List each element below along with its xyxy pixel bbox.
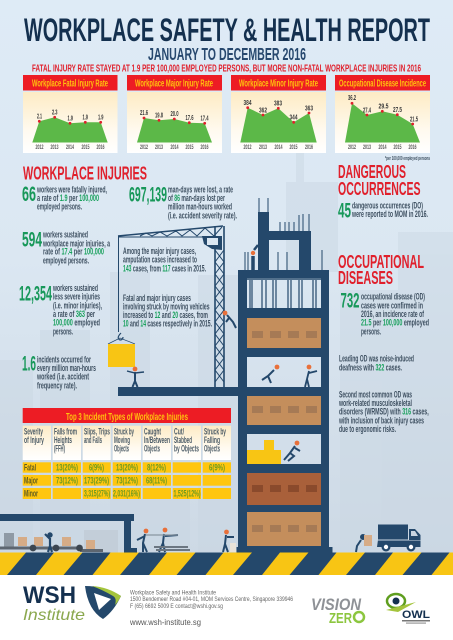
text: amputation cases: amputation cases increased to bbox=[123, 255, 197, 265]
table: top 3 incident types: Falling bbox=[204, 434, 220, 445]
table: top 3 incident types: (FFH) bbox=[54, 442, 65, 454]
chart: workplace major injury rate: 2014 bbox=[170, 145, 179, 151]
chart: workplace minor injury rate: 384 bbox=[244, 98, 252, 107]
chart: workplace fatal injury rate: Workplace Fatal Injury Rate bbox=[32, 78, 108, 90]
heading: occupational diseases bbox=[338, 251, 424, 288]
table: top 3 incident types: In/Between bbox=[144, 434, 170, 445]
logo: Vision Zero: ZER bbox=[329, 610, 352, 627]
stat: 697,139 man-days lost: 697,139 bbox=[129, 184, 167, 206]
stat: 66 fatalities bbox=[22, 183, 107, 212]
table: top 3 incident types: 173(29%) bbox=[84, 476, 109, 486]
chart: occupational disease incidence: 21.5 bbox=[410, 114, 418, 124]
table: top 3 incident types: and Falls bbox=[84, 434, 102, 445]
stat: 12,354 minor injuries: persons. bbox=[53, 326, 73, 336]
chart: occupational disease incidence: 27.5 bbox=[393, 105, 402, 114]
contact details: F (65) 6692 5009 E contact@wshi.gov.sg bbox=[130, 604, 223, 610]
chart: workplace fatal injury rate bbox=[23, 75, 118, 153]
chart: workplace major injury rate: 21.6 bbox=[140, 108, 148, 117]
chart: workplace major injury rate bbox=[127, 75, 222, 153]
table: top 3 incident types: 6(9%) bbox=[89, 462, 104, 472]
icon: delivery worker bbox=[356, 534, 372, 552]
chart: occupational disease incidence: 2015 bbox=[394, 145, 402, 151]
loading dock bbox=[0, 514, 137, 553]
table: top 3 incident types: 13(20%) bbox=[116, 462, 138, 472]
chart: occupational disease incidence: 36.2 bbox=[348, 93, 356, 102]
icon: delivery truck bbox=[377, 524, 420, 552]
stat: 594 major injuries: employed persons. bbox=[43, 256, 89, 266]
stat: 66 fatalities: 66 bbox=[22, 183, 36, 206]
icon: hanging crate bbox=[108, 344, 135, 367]
table: top 3 incident types: 8(12%) bbox=[147, 462, 166, 472]
contact details bbox=[129, 590, 294, 627]
table: top 3 incident types: 2,031(16%) bbox=[113, 488, 140, 498]
stat: 12,354 minor injuries bbox=[19, 282, 102, 336]
icon: conveyor worker bbox=[45, 533, 52, 552]
stat: 732 occupational disease cases bbox=[340, 290, 429, 336]
chart: occupational disease incidence: 2013 bbox=[363, 145, 371, 151]
stat: 697,139 man-days lost: of 86 man-days lost per bbox=[168, 193, 225, 203]
stat: 1.6 accident frequency rate: frequency rate). bbox=[37, 380, 77, 390]
stat: 697,139 man-days lost: million man-hours worked bbox=[168, 202, 232, 212]
chart: workplace fatal injury rate: 2013 bbox=[50, 145, 59, 151]
table: top 3 incident types: Cut/ bbox=[174, 426, 184, 436]
chart: workplace major injury rate: 19.8 bbox=[155, 110, 163, 120]
chart: workplace major injury rate: 17.6 bbox=[186, 113, 194, 122]
chart: workplace fatal injury rate: 1.9 bbox=[68, 114, 73, 122]
logo: Vision Zero bbox=[311, 595, 364, 627]
stat: 66 fatalities: a rate of 1.9 per 100,000 bbox=[37, 193, 99, 203]
icon: falling worker from crane bbox=[223, 311, 236, 328]
table: top 3 incident types: Struck by bbox=[114, 426, 134, 436]
stat: 594 major injuries bbox=[22, 228, 110, 266]
icon: worker on roof bbox=[251, 245, 258, 270]
stat: 1.6 accident frequency rate bbox=[22, 352, 96, 390]
chart: workplace minor injury rate: Workplace Minor Injury Rate bbox=[239, 78, 318, 90]
chart: workplace major injury rate: 2016 bbox=[200, 145, 209, 151]
logo: WSH Institute: Institute bbox=[23, 607, 85, 624]
table: top 3 incident types: of Injury bbox=[24, 434, 44, 445]
stat: 732 occupational disease cases: 732 bbox=[340, 290, 360, 312]
text: struck by moving vehicles: involving struck by moving vehicles bbox=[123, 302, 210, 312]
table: top 3 incident types: 13(20%) bbox=[56, 462, 78, 472]
chart: workplace minor injury rate: 363 bbox=[305, 104, 313, 112]
chart: workplace minor injury rate: 344 bbox=[290, 112, 298, 122]
chart: occupational disease incidence: 2016 bbox=[408, 145, 417, 151]
stat: 12,354 minor injuries: a rate of 363 per bbox=[53, 309, 95, 319]
chart: workplace fatal injury rate: 1.9 bbox=[98, 112, 104, 122]
stat: 12,354 minor injuries: workers sustained bbox=[52, 283, 98, 293]
chart: workplace fatal injury rate: 2012 bbox=[36, 145, 44, 151]
chart: workplace major injury rate: Workplace Major Injury Rate bbox=[135, 78, 213, 90]
chart: workplace major injury rate: 2015 bbox=[186, 145, 194, 151]
table: top 3 incident types: Objects bbox=[144, 442, 160, 454]
table: top 3 incident types: Stabbed bbox=[174, 434, 192, 445]
logo: WSH Institute: WSH bbox=[23, 582, 76, 609]
chart: workplace minor injury rate: 2015 bbox=[290, 145, 298, 151]
table: top 3 incident types: 73(12%) bbox=[116, 476, 138, 486]
table: top 3 incident types: 73(12%) bbox=[56, 476, 78, 486]
chart: workplace minor injury rate: 2016 bbox=[305, 145, 313, 151]
chart: workplace fatal injury rate: 2.3 bbox=[52, 108, 58, 116]
stat: 594 major injuries: workers sustained bbox=[42, 230, 88, 240]
text: leading occupational disease bbox=[339, 354, 414, 372]
table: top 3 incident types: Caught bbox=[144, 426, 161, 436]
stat: 66 fatalities: employed persons. bbox=[37, 202, 82, 212]
chart: workplace major injury rate: 20.0 bbox=[170, 109, 178, 118]
logo: WSH Institute bbox=[23, 582, 121, 624]
logo: OWL bbox=[386, 594, 430, 624]
table: top 3 incident types: Heights bbox=[54, 434, 72, 445]
chart: workplace major injury rate: 2012 bbox=[140, 145, 148, 151]
stat: 697,139 man-days lost: (i.e. accident severity rate). bbox=[168, 210, 237, 220]
building bbox=[236, 198, 332, 553]
text: struck by moving vehicles: Fatal and major injury cases bbox=[123, 293, 191, 303]
chart: workplace minor injury rate: 362 bbox=[259, 106, 267, 114]
stat: 732 occupational disease cases: 21.5 per 100,000 employed bbox=[361, 318, 429, 328]
text: struck by moving vehicles: increased to 12 and 20 cases, from bbox=[123, 310, 208, 320]
chart: workplace minor injury rate: 383 bbox=[274, 98, 282, 108]
text: amputation cases bbox=[123, 246, 206, 273]
icon: workers carrying beam bbox=[137, 528, 190, 552]
stat: 12,354 minor injuries: less severe injuries bbox=[53, 292, 100, 302]
footer bbox=[0, 575, 453, 640]
contact details: Workplace Safety and Health Institute bbox=[130, 590, 217, 596]
text: struck by moving vehicles: 10 and 14 cases respectively in 2015. bbox=[123, 319, 212, 329]
text: leading occupational disease: deafness with 322 cases. bbox=[339, 362, 402, 372]
text: second most common disease: disorders (WRMSD) with 316 cases, bbox=[339, 407, 429, 417]
table: top 3 incident types: 6(9%) bbox=[209, 462, 225, 472]
crane platform bbox=[118, 387, 240, 396]
chart: occupational disease incidence: 2012 bbox=[348, 145, 356, 151]
chart: workplace fatal injury rate: 2014 bbox=[66, 145, 74, 151]
logo: OWL: OWL bbox=[402, 609, 430, 621]
chart: workplace minor injury rate bbox=[231, 75, 326, 153]
contact details: www.wsh-institute.sg bbox=[129, 618, 201, 627]
chart: workplace fatal injury rate: 2016 bbox=[96, 145, 105, 151]
text: amputation cases: Among the major injury cases, bbox=[123, 246, 196, 256]
text: amputation cases: 143 cases, from 117 cases in 2015. bbox=[123, 263, 206, 273]
icon: conveyor with boxes bbox=[0, 533, 103, 552]
table: top 3 incident types: Falls from bbox=[54, 426, 77, 436]
text: second most common disease: due to ergonomic risks. bbox=[339, 424, 396, 434]
heading: dangerous occurrences bbox=[338, 161, 420, 199]
table: top 3 incident types: by Objects bbox=[174, 442, 199, 454]
icon: slipping worker bbox=[262, 365, 279, 383]
table: top 3 incident types: Objects bbox=[204, 442, 220, 454]
table: top 3 incident types: Moving bbox=[114, 434, 130, 445]
hazard stripe bbox=[0, 552, 453, 575]
table: top 3 incident types: 1,525(12%) bbox=[174, 488, 201, 498]
table: top 3 incident types: Struck by bbox=[204, 426, 226, 436]
icon: worker lifting box bbox=[223, 530, 236, 552]
table: top 3 incident types bbox=[23, 408, 231, 499]
table: top 3 incident types: Top 3 Incident Types of Workplace Injuries bbox=[66, 412, 188, 423]
table: top 3 incident types: 68(11%) bbox=[146, 476, 167, 486]
stat: 594 major injuries: workplace major injuries, a bbox=[42, 238, 110, 248]
chart: workplace minor injury rate: 2013 bbox=[259, 145, 267, 151]
stat: 45 dangerous occurrences: 45 bbox=[338, 200, 351, 222]
table: top 3 incident types: Minor bbox=[24, 488, 38, 498]
chart: workplace minor injury rate: 2014 bbox=[274, 145, 283, 151]
heading: occupational diseases: DISEASES bbox=[338, 267, 393, 288]
chart: workplace fatal injury rate: 2.1 bbox=[37, 112, 42, 120]
stat: 45 dangerous occurrences bbox=[338, 200, 428, 222]
chart: occupational disease incidence: 27.4 bbox=[363, 106, 371, 114]
stat: 12,354 minor injuries: (i.e. minor injuries), bbox=[53, 300, 102, 310]
stat: 1.6 accident frequency rate: worked (i.e. accident bbox=[36, 372, 89, 382]
chart: occupational disease incidence bbox=[335, 75, 430, 153]
stat: 12,354 minor injuries: 100,000 employed bbox=[53, 318, 100, 328]
heading: workplace injuries: WORKPLACE INJURIES bbox=[23, 162, 147, 184]
subtitle: JANUARY TO DECEMBER 2016 bbox=[148, 44, 306, 64]
stat: 66 fatalities: workers were fatally injured, bbox=[36, 184, 107, 194]
chart: workplace fatal injury rate: 2015 bbox=[82, 145, 90, 151]
text: struck by moving vehicles bbox=[123, 293, 212, 329]
chart: workplace fatal injury rate: 1.9 bbox=[82, 112, 88, 122]
chart: workplace major injury rate: 17.4 bbox=[200, 114, 209, 122]
stat: 1.6 accident frequency rate: 1.6 bbox=[22, 352, 36, 376]
table: top 3 incident types: Fatal bbox=[24, 462, 36, 472]
table: top 3 incident types: Major bbox=[24, 474, 38, 486]
table: top 3 incident types: Slips, Trips bbox=[84, 426, 110, 436]
stat: 1.6 accident frequency rate: every million man-hours bbox=[37, 363, 96, 373]
chart: occupational disease incidence: 29.5 bbox=[378, 102, 389, 110]
stat: 1.6 accident frequency rate: incidents occurred for bbox=[37, 354, 91, 364]
chart: workplace minor injury rate: 2012 bbox=[244, 145, 252, 151]
table: top 3 incident types: Objects bbox=[114, 442, 129, 454]
chart: workplace major injury rate: 2013 bbox=[155, 145, 163, 151]
stat: 594 major injuries: rate of 17.4 per 100,000 bbox=[43, 247, 104, 257]
logo: Vision Zero: VISION bbox=[311, 595, 362, 614]
stat: 697,139 man-days lost bbox=[129, 184, 237, 220]
table: top 3 incident types: Severity bbox=[24, 426, 43, 436]
stat: 697,139 man-days lost: man-days were lost, a rate bbox=[168, 184, 233, 194]
icon: worker under crate bbox=[127, 367, 144, 387]
stat: 594 major injuries: 594 bbox=[22, 228, 42, 252]
text: second most common disease bbox=[338, 390, 429, 434]
contact details: 1500 Bendemeer Road #04-01, MOM Services Centre, Singapore 339946 bbox=[130, 597, 294, 603]
chart: occupational disease incidence: 2014 bbox=[378, 145, 387, 151]
stat: 732 occupational disease cases: persons. bbox=[361, 326, 381, 336]
table: top 3 incident types: 3,315(27%) bbox=[84, 488, 110, 498]
stat: 12,354 minor injuries: 12,354 bbox=[19, 282, 52, 306]
icon: worker tripping bbox=[284, 441, 300, 461]
crane bbox=[108, 226, 224, 387]
icon: standing worker bbox=[305, 365, 317, 387]
